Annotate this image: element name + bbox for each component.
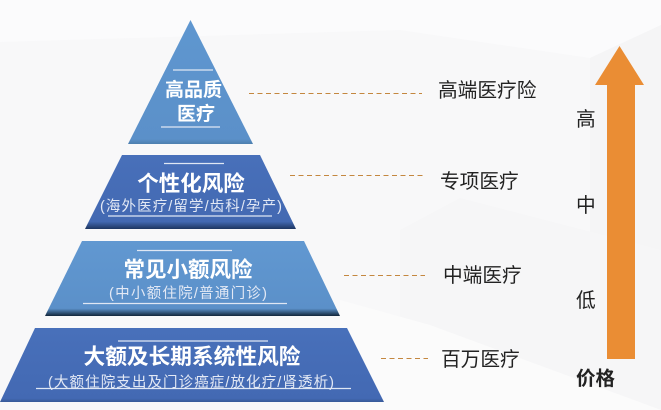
pyramid tier: large long-term systemic risk: (大额住院支出及门诊癌症/放化疗/肾透析)	[48, 374, 334, 391]
dashed connector: special	[290, 174, 425, 176]
price label: high: 高	[576, 109, 596, 131]
pyramid tier: common small-sum risk: (中小额住院/普通门诊)	[109, 285, 267, 302]
label: mid-range medical: 中端医疗	[443, 265, 522, 287]
pyramid tier: common small-sum risk	[45, 241, 340, 316]
dashed connector: mid-range	[344, 274, 425, 276]
dashed connector: million	[381, 358, 428, 360]
price label: low: 低	[576, 290, 596, 312]
pyramid tier: large long-term systemic risk	[0, 328, 384, 402]
arrow: price rising	[595, 46, 644, 359]
dashed connector: high-end	[249, 92, 422, 94]
label: million medical: 百万医疗	[441, 349, 520, 371]
pyramid tier: common small-sum risk: 常见小额风险	[123, 257, 253, 282]
pyramid tier: high-quality care	[128, 20, 253, 144]
pyramid tier: large long-term systemic risk: 大额及长期系统性风险	[84, 344, 301, 369]
pyramid tier: personalised risk	[85, 155, 296, 229]
pyramid tier: high-quality care: 高品质	[165, 78, 222, 101]
price label: medium: 中	[576, 195, 596, 217]
pyramid tier: personalised risk: (海外医疗/留学/齿科/孕产)	[100, 198, 282, 215]
label: high-end medical insurance: 高端医疗险	[438, 80, 537, 102]
pyramid tier: high-quality care: 医疗	[177, 103, 215, 125]
pyramid tier: personalised risk: 个性化风险	[137, 171, 245, 196]
label: special medical: 专项医疗	[440, 171, 519, 193]
price axis title: 价格	[576, 368, 616, 390]
